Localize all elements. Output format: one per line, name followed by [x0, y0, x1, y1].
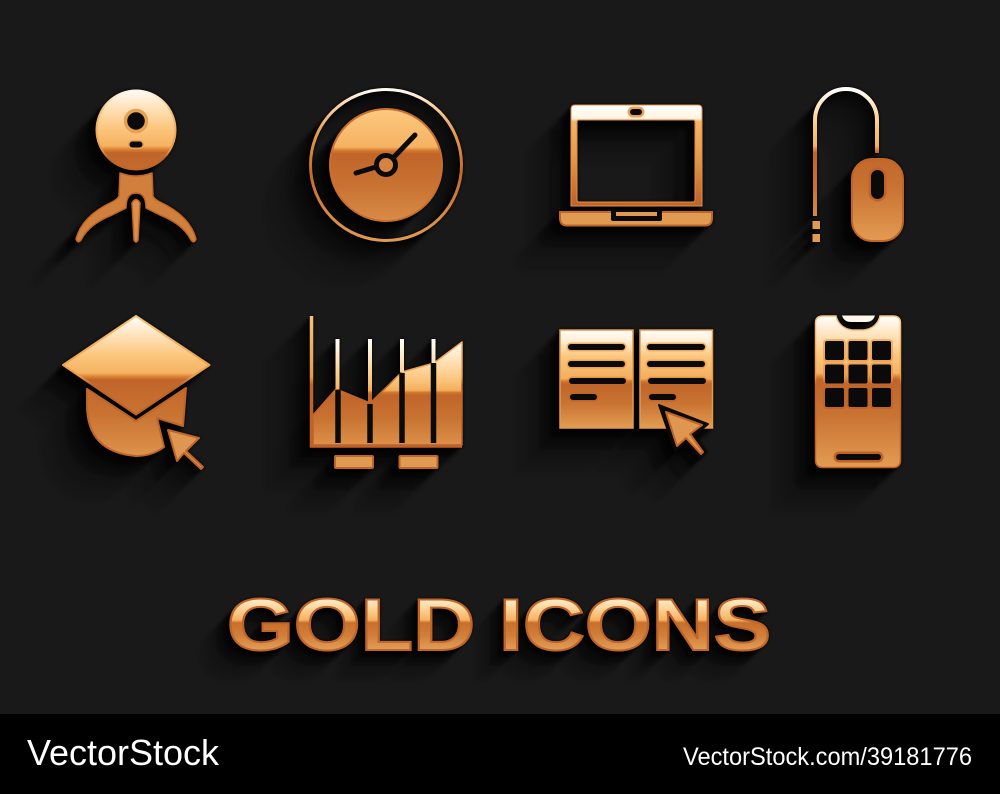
webcam stand	[76, 173, 196, 242]
chart legend left	[335, 456, 373, 468]
phone body	[816, 316, 900, 468]
chart axis	[312, 316, 462, 446]
webcam head	[96, 90, 176, 170]
phone notch	[842, 316, 875, 322]
icon: mouse with cable	[812, 89, 903, 242]
cap body	[87, 388, 186, 456]
cursor arrow	[168, 430, 203, 469]
mouse wheel	[871, 170, 884, 199]
laptop base	[560, 212, 712, 226]
book right page	[640, 330, 712, 428]
book left page	[560, 330, 633, 428]
icon: open book with cursor	[560, 330, 712, 458]
mouse plug	[812, 221, 820, 242]
icon: dial gauge	[310, 90, 462, 240]
icon: smartphone	[816, 316, 900, 468]
book text lines	[571, 347, 703, 397]
laptop camera	[630, 109, 642, 115]
phone home bar	[836, 454, 881, 460]
chart area	[313, 342, 462, 445]
icon: area chart	[312, 316, 462, 468]
icon: laptop	[560, 105, 712, 226]
dial face	[330, 109, 442, 221]
title: GOLD ICONS	[227, 585, 771, 666]
webcam slot	[130, 142, 142, 148]
webcam lens	[126, 110, 146, 132]
laptop touch bar	[616, 212, 657, 216]
chart upper bars	[338, 339, 434, 402]
chart legend right	[400, 456, 438, 468]
footer brand: VectorStock	[27, 732, 220, 773]
footer bar	[0, 714, 1000, 794]
phone app grid	[825, 341, 891, 407]
mouse cable	[815, 89, 877, 216]
webcam centre leg	[132, 200, 140, 242]
icon: webcam	[76, 90, 196, 242]
icon: graduation cap with cursor	[63, 316, 210, 469]
laptop notch	[611, 210, 662, 221]
book cursor	[666, 412, 703, 454]
mouse body	[852, 159, 903, 241]
dial outer ring	[310, 90, 462, 240]
dial hands	[356, 135, 415, 173]
chart lower gaps	[338, 363, 434, 443]
cursor outline	[659, 405, 708, 458]
cap mortarboard	[63, 316, 210, 414]
footer image id: VectorStock.com/39181776	[683, 743, 972, 771]
book line rings	[571, 347, 703, 397]
laptop screen frame	[571, 105, 702, 206]
dial hub	[376, 156, 396, 174]
